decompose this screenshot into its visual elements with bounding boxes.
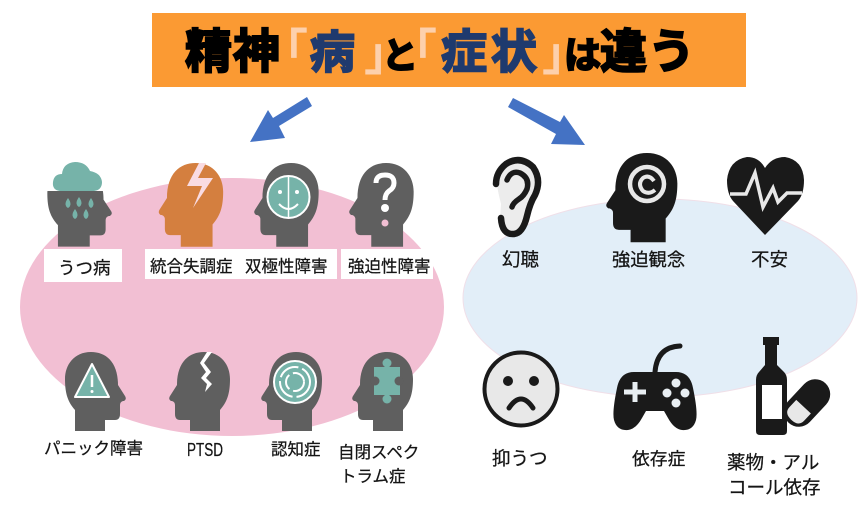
label: 自閉スペクトラム症: 自閉スペク [338, 443, 419, 462]
title banner: は [564, 35, 601, 76]
label: 抑うつ: 抑うつ [492, 448, 548, 469]
title banner: 精 [185, 25, 232, 78]
title banner: 」 [364, 27, 411, 80]
icon: schizophrenia head with lightning [159, 163, 223, 247]
label: 不安: 不安 [751, 249, 788, 270]
icon: sad face [484, 352, 558, 426]
title banner: 神 [233, 25, 280, 78]
icon: ear [496, 159, 539, 235]
label: 認知症: 認知症 [271, 440, 320, 459]
panel: symptoms ellipse [463, 199, 857, 397]
icon: game controller [613, 346, 697, 430]
title banner [152, 13, 746, 87]
label: 幻聴: 幻聴 [502, 249, 540, 270]
panel: illnesses ellipse [20, 178, 444, 436]
label: PTSD: PTSD [187, 440, 223, 460]
title banner: 「 [261, 25, 308, 78]
title banner: 「 [390, 25, 437, 78]
title banner: 状 [491, 26, 537, 78]
icon: bottle and pill [756, 337, 836, 435]
title banner: う [648, 25, 695, 78]
arrow: to illnesses [250, 97, 312, 142]
icon: dementia head with maze [261, 352, 322, 431]
label: 依存症: 依存症 [632, 449, 686, 469]
arrow: to symptoms [508, 98, 585, 145]
icon: autism head with puzzle piece [352, 352, 413, 431]
label: 薬物・アルコール依存: 薬物・アル [727, 452, 819, 473]
label: 自閉スペクトラム症: トラム症 [340, 467, 406, 486]
title banner: 病 [310, 27, 355, 78]
label: 強迫観念: 強迫観念 [612, 249, 685, 270]
title banner: 症 [441, 26, 487, 78]
icon: PTSD head with crack [169, 352, 230, 431]
label backgrounds [44, 249, 433, 282]
icon: head with spiral [606, 153, 677, 242]
title banner: 違 [600, 25, 647, 78]
label: 双極性障害: 双極性障害 [245, 257, 328, 276]
label: うつ病: うつ病 [58, 258, 110, 278]
icon: depression head with rain cloud [47, 162, 112, 247]
label: パニック障害: パニック障害 [44, 439, 143, 458]
title banner: 」 [542, 27, 589, 80]
icon: OCD head with question mark [349, 163, 414, 247]
icon: panic head with warning triangle [65, 352, 126, 431]
title banner: と [382, 35, 418, 76]
icon: heart with pulse [727, 157, 804, 235]
label: 薬物・アルコール依存: コール依存 [728, 477, 821, 498]
icon: bipolar head with smile [254, 163, 319, 247]
label: 統合失調症: 統合失調症 [150, 257, 232, 276]
label: 強迫性障害: 強迫性障害 [348, 257, 430, 276]
